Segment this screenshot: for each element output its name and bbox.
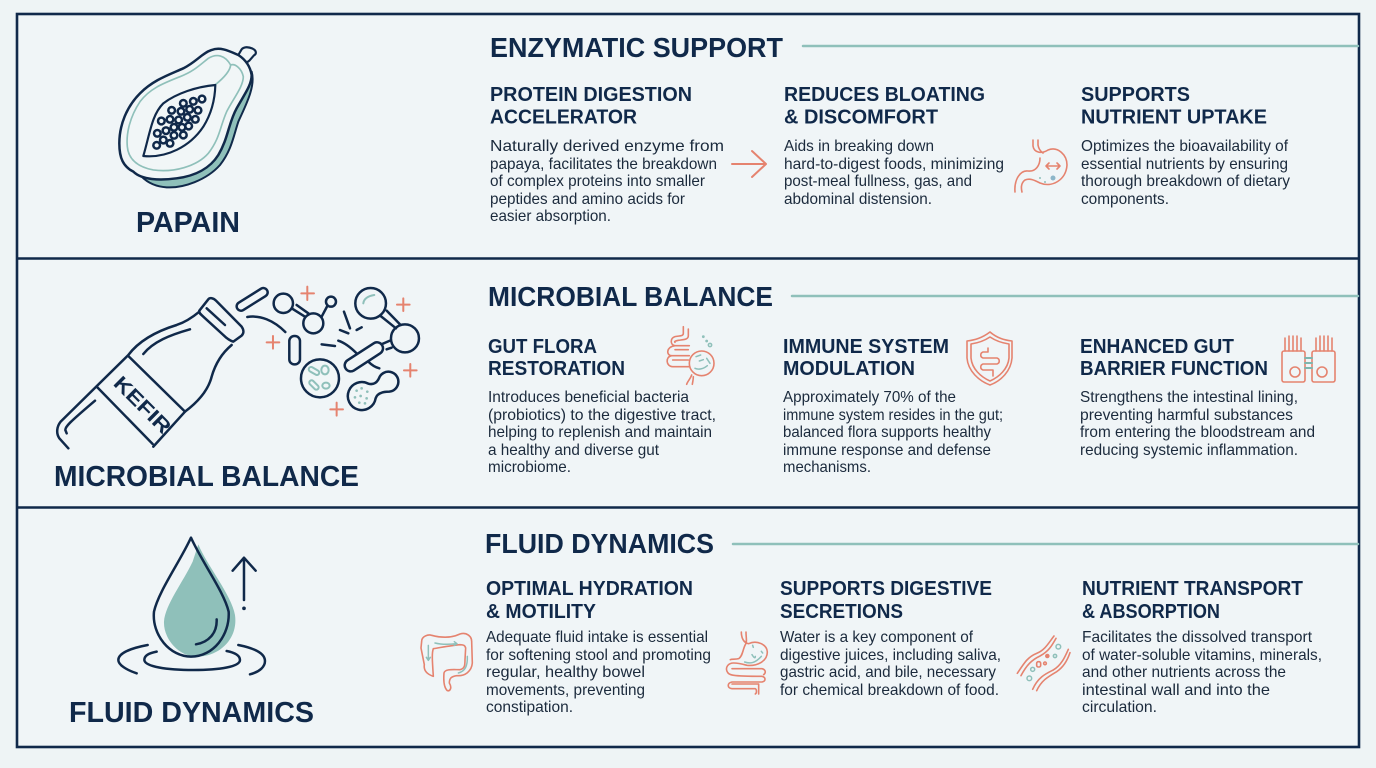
column: protein digestion accelerator: PROTEIN DIGESTION: [490, 84, 692, 106]
column: optimal hydration: [486, 578, 711, 716]
column: immune system modulation: mechanisms.: [783, 459, 871, 476]
column: gut flora restoration: Introduces beneficial bacteria: [488, 389, 689, 406]
column: immune system modulation: balanced flora supports healthy: [783, 424, 991, 441]
column: gut flora restoration: (probiotics) to the digestive tract,: [488, 407, 716, 424]
panel label: PAPAIN: PAPAIN: [136, 207, 240, 239]
icon: kefir bottle with microbes: [57, 286, 419, 448]
column: supports digestive secretions: digestive juices, including saliva,: [780, 647, 1001, 664]
column: gut flora restoration: helping to replenish and maintain: [488, 424, 712, 441]
column: nutrient transport: [1082, 578, 1322, 716]
column: supports nutrient uptake: essential nutrients by ensuring: [1081, 156, 1288, 173]
column: enhanced gut barrier: preventing harmful substances: [1080, 407, 1293, 424]
column: immune system modulation: Approximately 70% of the: [783, 389, 956, 406]
column: nutrient transport: Facilitates the dissolved transport: [1082, 629, 1313, 646]
column: enhanced gut barrier: ENHANCED GUT: [1080, 336, 1235, 358]
column: enhanced gut barrier: reducing systemic inflammation.: [1080, 442, 1298, 459]
column: protein digestion accelerator: Naturally derived enzyme from: [490, 138, 724, 155]
column: supports nutrient uptake: components.: [1081, 191, 1169, 208]
column: protein digestion accelerator: peptides and amino acids for: [490, 191, 685, 208]
icon: shield with gut: [967, 332, 1012, 385]
column: supports digestive secretions: Water is a key component of: [780, 629, 974, 646]
column: supports nutrient uptake: NUTRIENT UPTAKE: [1081, 106, 1267, 128]
column: supports digestive secretions: SUPPORTS DIGESTIVE: [780, 578, 992, 600]
column: protein digestion accelerator: easier absorption.: [490, 208, 611, 225]
column: nutrient transport: & ABSORPTION: [1082, 601, 1220, 623]
panel label: fluid dynamics: FLUID DYNAMICS: [69, 697, 314, 729]
panel label: microbial balance: MICROBIAL BALANCE: [54, 461, 359, 493]
column: immune system modulation: immune response and defense: [783, 442, 991, 459]
icon: water drop with ripples: [118, 538, 265, 674]
column: gut flora restoration: microbiome.: [488, 459, 571, 476]
panel: fluid dynamics: [69, 528, 1358, 729]
column: reduces bloating: [784, 84, 1004, 208]
column: nutrient transport: of water-soluble vitamins, minerals,: [1082, 647, 1322, 664]
column: optimal hydration: movements, preventing: [486, 682, 645, 699]
column: enhanced gut barrier: Strengthens the intestinal lining,: [1080, 389, 1298, 406]
column: optimal hydration: & MOTILITY: [486, 601, 596, 623]
column: supports digestive secretions: for chemical breakdown of food.: [780, 682, 999, 699]
column: supports nutrient uptake: SUPPORTS: [1081, 84, 1190, 106]
column: optimal hydration: constipation.: [486, 699, 573, 716]
column: supports nutrient uptake: [1081, 84, 1290, 208]
column: protein digestion accelerator: [490, 84, 724, 225]
column: gut flora restoration: GUT FLORA: [488, 336, 597, 358]
panel: papain: [119, 32, 1358, 239]
column: nutrient transport: intestinal wall and into the: [1082, 682, 1270, 699]
column: reduces bloating: REDUCES BLOATING: [784, 84, 985, 106]
column: gut flora restoration: a healthy and diverse gut: [488, 442, 660, 459]
column: reduces bloating: Aids in breaking down: [784, 138, 934, 155]
column: nutrient transport: circulation.: [1082, 699, 1157, 716]
column: gut flora restoration: RESTORATION: [488, 358, 625, 380]
column: immune system modulation: [783, 336, 1003, 476]
column: immune system modulation: immune system resides in the gut;: [783, 407, 1003, 424]
column: supports nutrient uptake: thorough breakdown of dietary: [1081, 173, 1290, 190]
column: reduces bloating: hard-to-digest foods, minimizing: [784, 156, 1004, 173]
column: reduces bloating: post-meal fullness, gas, and: [784, 173, 972, 190]
column: reduces bloating: & DISCOMFORT: [784, 106, 939, 128]
column: nutrient transport: NUTRIENT TRANSPORT: [1082, 578, 1304, 600]
column: protein digestion accelerator: papaya, facilitates the breakdown: [490, 156, 717, 173]
column: enhanced gut barrier: [1080, 336, 1315, 459]
heading: enzymatic support: ENZYMATIC SUPPORT: [490, 32, 783, 63]
column: optimal hydration: regular, healthy bowel: [486, 664, 645, 681]
column: enhanced gut barrier: from entering the bloodstream and: [1080, 424, 1315, 441]
column: immune system modulation: MODULATION: [783, 358, 915, 380]
column: protein digestion accelerator: ACCELERATOR: [490, 106, 637, 128]
column: protein digestion accelerator: of complex proteins into smaller: [490, 173, 705, 190]
icon: colon: [421, 634, 472, 691]
column: supports digestive secretions: SECRETIONS: [780, 601, 903, 623]
heading: fluid dynamics: FLUID DYNAMICS: [485, 528, 714, 559]
column: reduces bloating: abdominal distension.: [784, 191, 932, 208]
column: optimal hydration: for softening stool and promoting: [486, 647, 711, 664]
icon: blood vessel with nutrients: [1017, 636, 1070, 691]
icon: stomach: [1015, 140, 1067, 192]
icon: stomach and intestine: [727, 632, 767, 694]
column: nutrient transport: and other nutrients across the: [1082, 664, 1286, 681]
arrow: coral: [732, 151, 766, 177]
column: gut flora restoration: [488, 336, 716, 476]
column: supports digestive secretions: gastric acid, and bile, necessary: [780, 664, 996, 681]
icon: gut barrier cells: [1282, 336, 1335, 382]
column: optimal hydration: Adequate fluid intake is essential: [486, 629, 708, 646]
panel: microbial balance: [54, 281, 1358, 493]
column: supports digestive secretions: [780, 578, 1001, 699]
column: supports nutrient uptake: Optimizes the bioavailability of: [1081, 138, 1289, 155]
column: enhanced gut barrier: BARRIER FUNCTION: [1080, 358, 1268, 380]
icon: intestine with flora: [667, 327, 714, 384]
column: immune system modulation: IMMUNE SYSTEM: [783, 336, 949, 358]
heading: microbial balance: MICROBIAL BALANCE: [488, 281, 773, 312]
icon: papaya: [119, 47, 256, 187]
column: optimal hydration: OPTIMAL HYDRATION: [486, 578, 693, 600]
icon: kefir bottle with microbes: KEFIR: [109, 372, 175, 439]
